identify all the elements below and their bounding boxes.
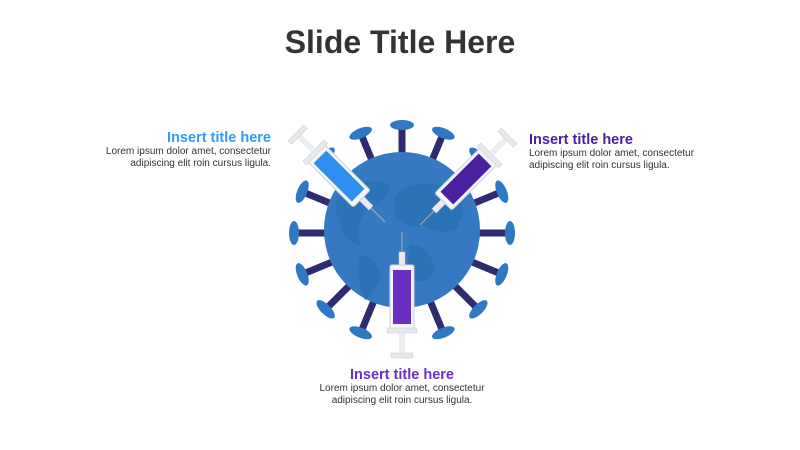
- text block: right: Lorem ipsum dolor amet, consectetur: [529, 148, 694, 159]
- syringe: left: [285, 122, 396, 233]
- text block: right: [529, 132, 694, 171]
- text block: right: adipiscing elit roin cursus ligula.: [529, 160, 670, 171]
- globe: [324, 152, 480, 308]
- text block: bottom: Insert title here: [350, 367, 454, 383]
- text block: left: [106, 130, 271, 169]
- text block: bottom: Lorem ipsum dolor amet, consectetur: [319, 383, 485, 394]
- spikes: [289, 120, 515, 342]
- text block: left: Lorem ipsum dolor amet, consectetur: [106, 146, 271, 157]
- text block: right: Insert title here: [529, 132, 633, 148]
- text block: left: Insert title here: [167, 130, 271, 146]
- title: Slide Title Here: [285, 24, 515, 60]
- text block: left: adipiscing elit roin cursus ligula.: [130, 158, 271, 169]
- syringe: bottom: [387, 232, 417, 358]
- syringe: right: [409, 125, 520, 236]
- text block: bottom: adipiscing elit roin cursus ligula.: [332, 395, 472, 406]
- text block: bottom: [319, 367, 485, 406]
